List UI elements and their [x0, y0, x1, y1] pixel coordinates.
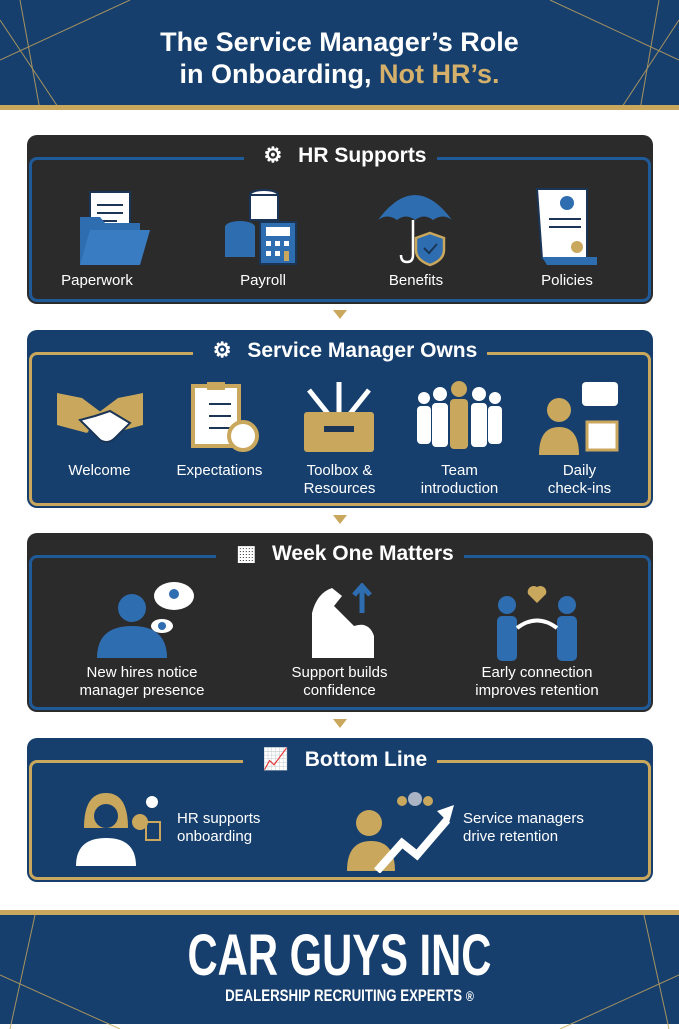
panel: Week One Matters: confidence — [303, 682, 376, 699]
panel: Service Manager Owns: Expectations — [177, 462, 262, 479]
panel: Week One Matters — [27, 533, 653, 712]
icon: payroll — [225, 189, 297, 265]
icon: HR person — [76, 793, 161, 866]
labels: New hires notice — [87, 664, 197, 681]
icon: manager presence — [97, 582, 194, 658]
arrow — [333, 515, 347, 524]
text: Service managers drive retention: drive retention — [463, 828, 558, 845]
icon: service manager growth — [347, 792, 454, 873]
logo: DEALERSHIP RECRUITING EXPERTS ® — [225, 986, 474, 1005]
title: The Service Manager’s Role — [160, 27, 519, 57]
arrow — [333, 310, 347, 319]
icon: expectations — [191, 382, 259, 452]
labels — [79, 664, 205, 699]
text: Service managers drive retention — [463, 810, 584, 845]
panel: Service Manager Owns: check-ins — [548, 480, 611, 497]
logo: CAR GUYS INC — [188, 923, 491, 988]
icon: toolbox — [304, 382, 374, 452]
text: HR supports onboarding — [177, 810, 260, 845]
title — [160, 27, 519, 89]
icon: benefits — [378, 195, 452, 266]
icon: handshake — [57, 393, 143, 443]
icon: policies — [536, 188, 597, 265]
panel: Week One Matters: Early connection — [482, 664, 592, 681]
labels: Paperwork — [61, 272, 133, 289]
panel: Service Manager Owns — [27, 330, 653, 508]
heading: ⚙ Service Manager Owns — [213, 339, 477, 362]
icon: connection — [497, 586, 577, 661]
icon: daily check-ins — [539, 382, 618, 455]
panel: HR Supports: Policies — [541, 272, 593, 289]
panel: Service Manager Owns: Team — [441, 462, 478, 479]
footer banner — [0, 910, 679, 1024]
panel: Week One Matters: Support builds — [292, 664, 387, 681]
panel: Service Manager Owns: Resources — [304, 480, 375, 497]
panel: Week One Matters: improves retention — [475, 682, 599, 699]
panel: HR Supports: Benefits — [389, 272, 443, 289]
icon: team — [417, 381, 502, 449]
panel: Service Manager Owns: Toolbox & — [307, 462, 372, 479]
icon: confidence — [312, 583, 374, 658]
panel: HR Supports — [27, 135, 653, 304]
labels: Welcome — [68, 462, 131, 479]
heading: ▦ Week One Matters — [236, 542, 454, 565]
panel: Bottom Line — [27, 738, 653, 882]
title: in Onboarding, Not HR’s. — [180, 59, 499, 89]
header banner — [0, 0, 679, 110]
text: HR supports onboarding: onboarding — [177, 828, 252, 845]
labels: manager presence — [79, 682, 205, 699]
text: Service managers drive retention: Service managers — [463, 810, 584, 827]
panel: Service Manager Owns: introduction — [421, 480, 498, 497]
heading: HR Supports: ⚙ HR Supports — [264, 144, 426, 167]
panel: HR Supports: Payroll — [240, 272, 286, 289]
arrow — [333, 719, 347, 728]
panel: Service Manager Owns: Daily — [563, 462, 596, 479]
icon: paperwork — [80, 191, 150, 265]
heading: 📈 Bottom Line — [263, 748, 427, 771]
text: HR supports onboarding: HR supports — [177, 810, 260, 827]
